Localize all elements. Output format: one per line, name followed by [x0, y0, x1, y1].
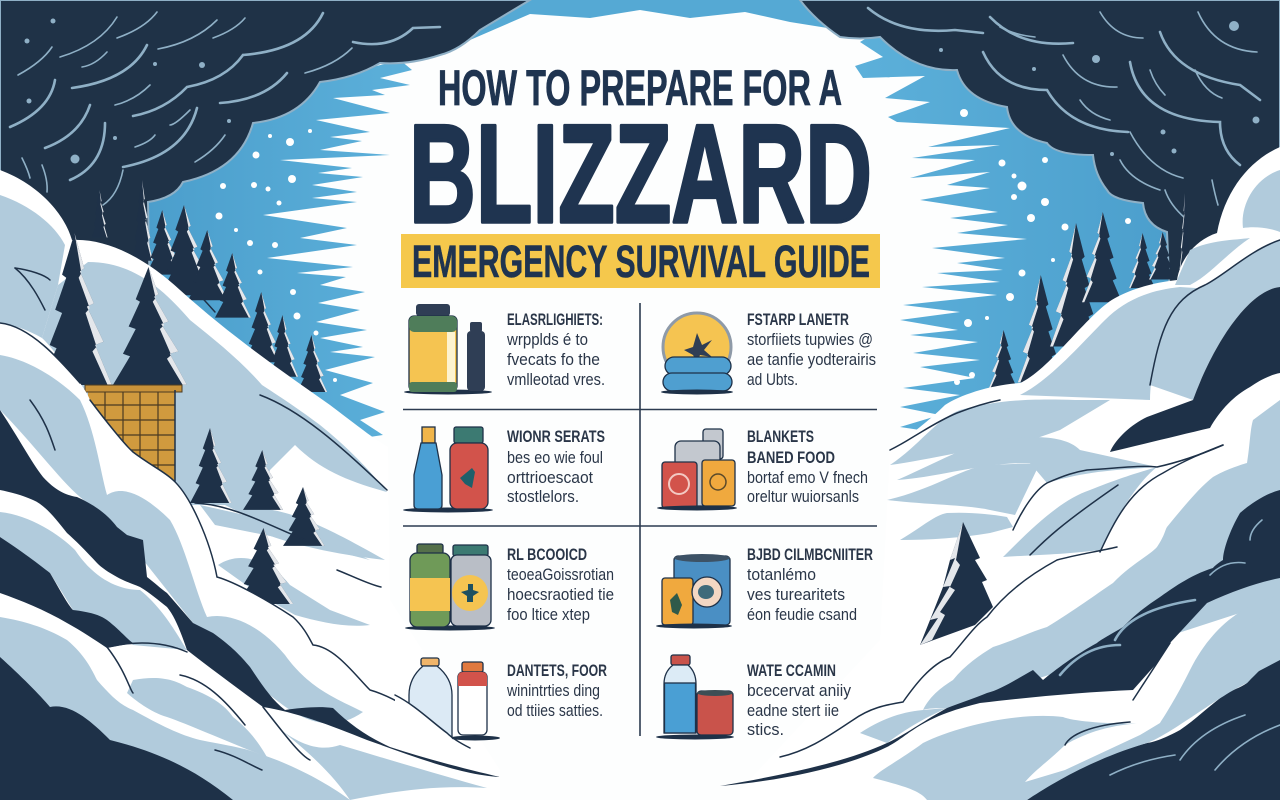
- lower-slope trees: [190, 428, 325, 604]
- text block: eadne stert iie: [747, 701, 839, 720]
- cloud swoosh highlights: [868, 8, 1260, 218]
- heading: Blizzard: BLIZZARD: [409, 95, 872, 252]
- large pale slope: [923, 400, 1280, 710]
- text block: [506, 661, 607, 720]
- text block: winintrties ding: [506, 681, 600, 700]
- item 3: water bottles: [403, 427, 605, 512]
- text block: [747, 310, 876, 389]
- text block: RL BCOOICD: [507, 545, 587, 564]
- dark patches: [720, 287, 1280, 800]
- text block: FSTARP LANETR: [747, 310, 849, 329]
- text block: BANED FOOD: [747, 448, 835, 467]
- text block: WATE CCAMIN: [747, 661, 836, 680]
- snow dots in sky: [216, 109, 1131, 385]
- text block: [506, 310, 605, 389]
- banner: emergency survival guide: [401, 234, 880, 288]
- text block: éon feudie csand: [747, 605, 857, 624]
- text block: hoecsraotied tie: [507, 585, 614, 604]
- white wedge highlight: [1025, 723, 1160, 782]
- tree line: left ridge: [92, 180, 327, 392]
- text block: wrpplds é to: [506, 330, 588, 349]
- heading: How to prepare for a: HOW TO PREPARE FOR A: [438, 60, 842, 116]
- pale sliver under contour: [860, 708, 947, 743]
- storm cloud: left: [0, 0, 530, 300]
- brick chimney: [85, 385, 182, 482]
- text block: foo ltice xtep: [507, 605, 590, 624]
- text block: [507, 427, 605, 506]
- icon: blue drum and orange can: [656, 554, 732, 628]
- item 1: flashlights: [404, 304, 605, 394]
- item 5: medicine jars: [405, 544, 614, 630]
- item 6: large cans: [656, 545, 873, 628]
- text block: vmlleotad vres.: [507, 370, 605, 389]
- text block: DANTETS, FOOR: [507, 661, 607, 680]
- text block: oreltur wuiorsanls: [747, 487, 859, 506]
- text block: BLANKETS: [747, 427, 814, 446]
- grid dividers: [403, 303, 877, 736]
- right snow mass: [740, 147, 1280, 800]
- text block: [747, 661, 851, 739]
- text block: bes eo wie foul: [507, 448, 603, 467]
- text block: [747, 545, 873, 624]
- icon: milk bottle and white bottle: [409, 658, 500, 740]
- item 4: canned food: [657, 427, 868, 510]
- text block: fvecats fo the: [507, 350, 600, 369]
- text block: WIONR SERATS: [507, 427, 605, 446]
- far streak shading: [887, 399, 1157, 557]
- storm cloud: right: [800, 0, 1280, 300]
- text block: ae tanfie yodterairis: [747, 350, 876, 369]
- snow hills: left: [0, 170, 500, 800]
- text block: bortaf emo V fnech: [747, 468, 868, 487]
- icon: canister and flashlight: [404, 304, 492, 394]
- snow contour lines: [780, 240, 1280, 757]
- text block: ELASRLIGHIETS:: [507, 310, 603, 329]
- text block: teoeaGoissrotian: [507, 565, 614, 584]
- dark snow shadows: [0, 410, 500, 800]
- text block: stics.: [747, 720, 784, 739]
- snow drift overlapping bottle: [395, 695, 470, 748]
- sky: top centre: [440, 0, 840, 50]
- front slope pale shading: [0, 355, 487, 800]
- item 8: water and can: [656, 655, 851, 740]
- item 2: lantern and blanket: [661, 310, 876, 394]
- icon: stacked cans: [657, 429, 737, 510]
- text block: totanlémo: [747, 565, 816, 584]
- icon: blue bottle and red jar: [403, 427, 493, 512]
- text block: bcecervat aniiy: [747, 681, 851, 700]
- banner: emergency survival guide: EMERGENCY SURVIVAL GUIDE: [412, 236, 870, 287]
- text block: storfiiets tupwies @: [747, 330, 873, 349]
- lone pine tree: [920, 522, 993, 645]
- text block: stostlelors.: [507, 487, 579, 506]
- text block: [507, 545, 614, 624]
- text block: ad Ubts.: [747, 370, 798, 389]
- text block: [747, 427, 868, 506]
- upper mound shading: [1020, 170, 1280, 400]
- text block: od ttiies satties.: [507, 701, 603, 720]
- far hill shading: [0, 195, 387, 626]
- snow hills: right: [720, 147, 1280, 800]
- text block: ves turearitets: [747, 585, 845, 604]
- sky: left: [130, 60, 412, 440]
- foreground trees: [40, 233, 187, 385]
- icon: lantern on blanket: [661, 313, 733, 394]
- snow contour lines: [0, 268, 447, 770]
- icon: green and grey jars: [405, 544, 495, 630]
- text block: orttrioescaot: [507, 468, 593, 487]
- cloud swoosh highlights: [10, 12, 440, 205]
- sky: right: [855, 30, 1200, 430]
- item 7: plastic bottles: [409, 658, 607, 740]
- dark patch swooshes: [1060, 520, 1280, 775]
- icon: water bottle and red can: [656, 655, 734, 740]
- pale band under dark: [1160, 595, 1280, 723]
- tree line: right ridge: [989, 193, 1190, 388]
- front white slope: [0, 323, 500, 800]
- text block: BJBD CILMBCNIITER: [747, 545, 873, 564]
- far snow mass: [0, 170, 500, 800]
